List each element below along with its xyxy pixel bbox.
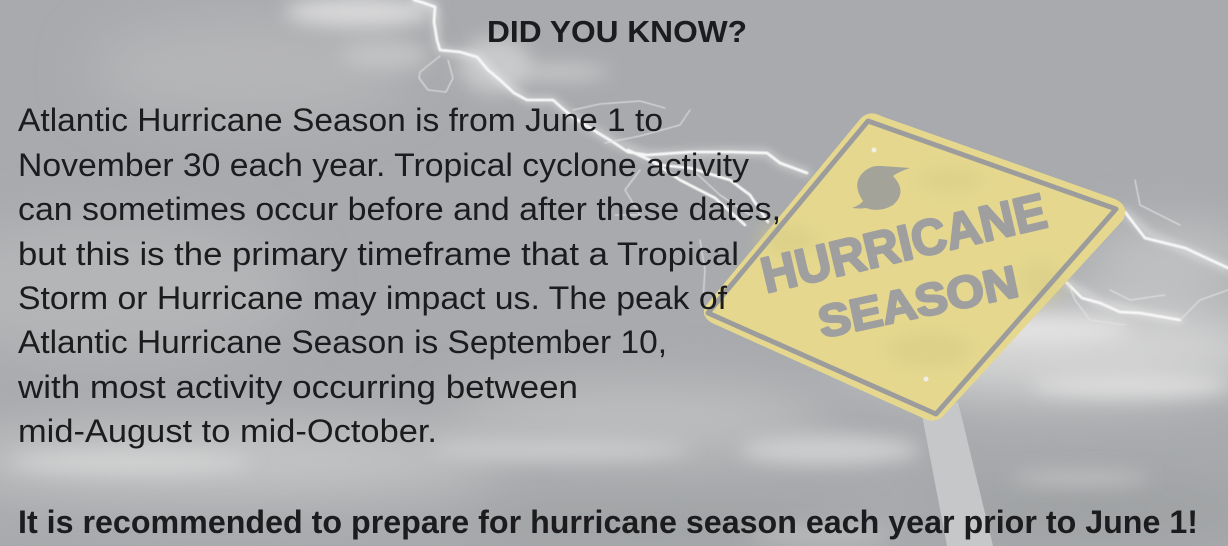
sign bolts	[872, 148, 928, 382]
body text: Atlantic Hurricane Season is September 10,	[18, 324, 667, 360]
sign border	[708, 121, 1116, 414]
body text	[17, 102, 781, 449]
lightning bolts	[414, 0, 1228, 325]
body text: November 30 each year. Tropical cyclone activity	[18, 147, 749, 183]
title: DID YOU KNOW?	[487, 14, 747, 49]
sign panel	[704, 113, 1125, 421]
icon: hurricane symbol	[852, 166, 910, 210]
body text: mid-August to mid-October.	[18, 413, 437, 449]
pole	[922, 402, 993, 546]
sign wear patches	[760, 168, 1060, 368]
body text: but this is the primary timeframe that a Tropical	[18, 236, 739, 272]
body text: can sometimes occur before and after these dates,	[18, 191, 781, 227]
body text: with most activity occurring between	[17, 369, 578, 405]
recommendation callout: It is recommended to prepare for hurricane season each year prior to June 1!	[18, 504, 1198, 540]
hurricane season sign	[704, 113, 1125, 421]
sign text: season: SEASON	[813, 256, 1023, 348]
sign text: hurricane: HURRICANE	[756, 183, 1052, 304]
body text: Storm or Hurricane may impact us. The peak of	[18, 280, 727, 316]
body text: Atlantic Hurricane Season is from June 1 to	[18, 102, 663, 138]
